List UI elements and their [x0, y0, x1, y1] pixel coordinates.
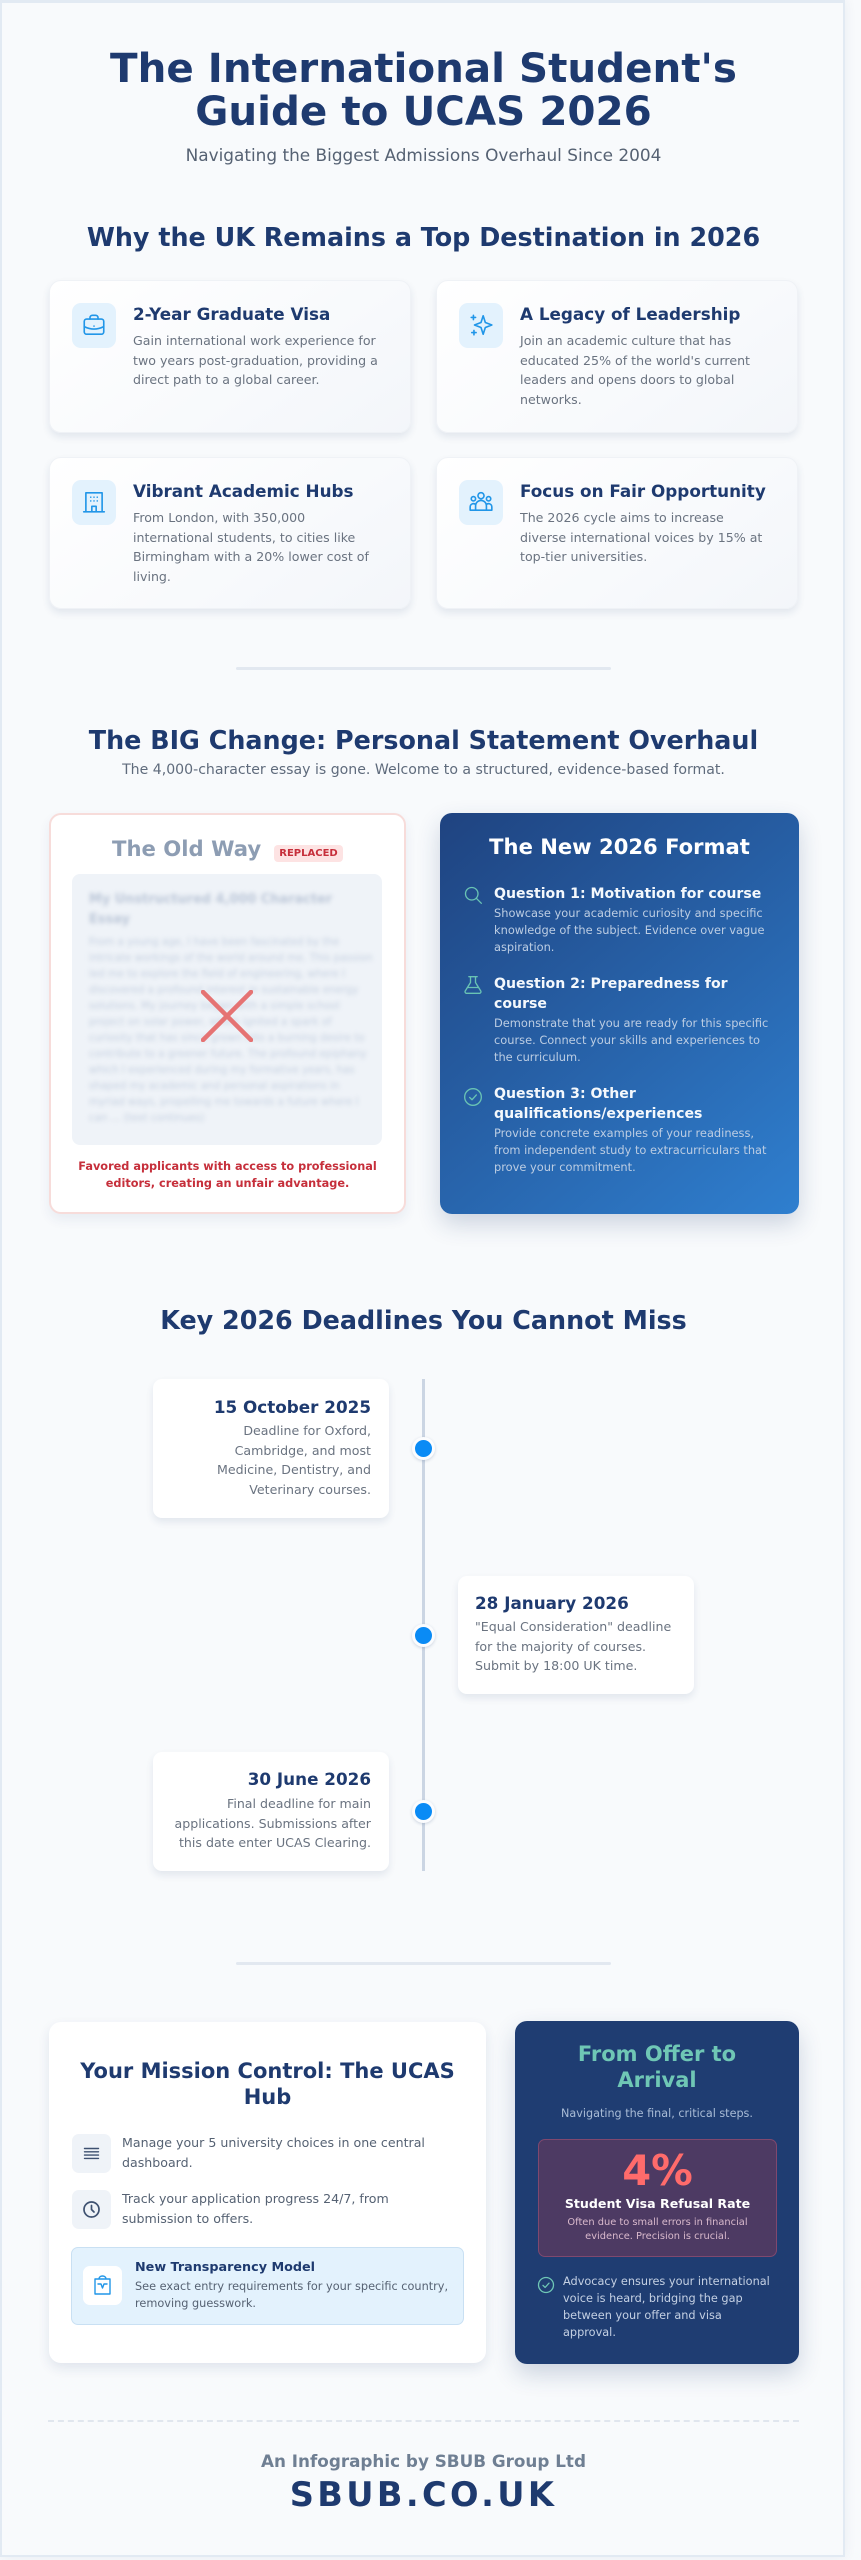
- stat note: [567, 2217, 748, 2242]
- description: Veterinary courses.: [249, 1482, 371, 1497]
- description: this date enter UCAS Clearing.: [179, 1835, 371, 1850]
- icon: building: [72, 480, 116, 525]
- feature text: Track your application progress 24/7, from: [122, 2191, 389, 2206]
- question 1 text: knowledge of the subject. Evidence over vague: [494, 923, 764, 937]
- callout: transparency: [71, 2247, 464, 2325]
- timeline dot 1: [412, 1437, 435, 1460]
- advocacy text: Advocacy ensures your international: [563, 2275, 770, 2288]
- card text: Join an academic culture that has: [520, 333, 731, 348]
- card text: From London, with 350,000: [133, 510, 305, 525]
- blurred essay: can ... (text continues): [89, 1113, 204, 1124]
- callout title: New Transparency Model: [135, 2260, 315, 2275]
- description: applications. Submissions after: [175, 1816, 371, 1831]
- description: Final deadline for main: [227, 1796, 371, 1811]
- arrival heading: From Offer to: [578, 2042, 736, 2066]
- badge: replaced: [274, 845, 343, 862]
- description: Cambridge, and most: [235, 1443, 371, 1458]
- card text: [520, 510, 762, 564]
- advocacy text: voice is heard, bridging the gap: [563, 2292, 743, 2305]
- question 3: [464, 1086, 767, 1174]
- stat panel: refusal rate: [538, 2139, 777, 2257]
- question 3 text: prove your commitment.: [494, 1160, 636, 1174]
- mission heading: Hub: [244, 2084, 291, 2108]
- description: "Equal Consideration" deadline: [475, 1619, 671, 1634]
- question 1: [464, 886, 764, 954]
- feature text: [122, 2191, 389, 2226]
- card text: [133, 510, 370, 584]
- icon: people: [459, 480, 503, 525]
- question 3 title: qualifications/experiences: [494, 1106, 702, 1122]
- question 1 text: [494, 906, 764, 954]
- panel: fair opportunity: [436, 457, 798, 609]
- blurred essay: intricate workings of the world around me. This passion: [89, 953, 373, 964]
- heading: deadlines: Key 2026 Deadlines You Cannot Miss: [160, 1305, 687, 1335]
- description: Deadline for Oxford,: [243, 1423, 371, 1438]
- timeline dot 2: [412, 1624, 435, 1647]
- description: [175, 1796, 371, 1850]
- callout text: removing guesswork.: [135, 2297, 256, 2310]
- card title: Focus on Fair Opportunity: [520, 481, 766, 501]
- mission heading: [80, 2059, 455, 2108]
- question 3 text: Provide concrete examples of your readiness,: [494, 1126, 754, 1140]
- blurred essay: [72, 874, 382, 1145]
- panel: mission control: [49, 2022, 486, 2363]
- question 3 text: [494, 1126, 767, 1174]
- new format heading: The New 2026 Format: [489, 834, 750, 859]
- card text: diverse international voices by 15% at: [520, 530, 762, 545]
- feature text: submission to offers.: [122, 2211, 253, 2226]
- title: [110, 44, 737, 135]
- feature text: Manage your 5 university choices in one central: [122, 2135, 425, 2150]
- blurred essay: shaped my academic and personal aspirations in: [89, 1081, 339, 1092]
- icon: flask: [464, 976, 482, 994]
- feature text: dashboard.: [122, 2155, 193, 2170]
- panel: the old way: [49, 813, 406, 1214]
- card text: top-tier universities.: [520, 549, 647, 564]
- old way note: Favored applicants with access to professional: [78, 1160, 377, 1173]
- card text: The 2026 cycle aims to increase: [520, 510, 724, 525]
- question 1 text: aspiration.: [494, 940, 554, 954]
- footer credit: An Infographic by SBUB Group Ltd: [261, 2451, 586, 2471]
- feature text: [122, 2135, 425, 2170]
- question 3 title: [494, 1086, 702, 1122]
- feature: tracking: [72, 2190, 389, 2229]
- question 1 title: Question 1: Motivation for course: [494, 886, 761, 902]
- subtitle: Navigating the Biggest Admissions Overhaul Since 2004: [186, 145, 661, 165]
- stat note: Often due to small errors in financial: [567, 2217, 748, 2228]
- card title: A Legacy of Leadership: [520, 304, 740, 324]
- date: 15 October 2025: [214, 1397, 371, 1417]
- timeline dot 3: [412, 1800, 435, 1823]
- title: Guide to UCAS 2026: [195, 87, 652, 135]
- advocacy text: approval.: [563, 2326, 616, 2339]
- description: Submit by 18:00 UK time.: [475, 1658, 637, 1673]
- card text: living.: [133, 569, 171, 584]
- panel: legacy of leadership: [436, 280, 798, 433]
- question 2 text: the curriculum.: [494, 1050, 581, 1064]
- feature: dashboard: [72, 2134, 425, 2173]
- question 2 title: Question 2: Preparedness for: [494, 976, 728, 992]
- badge: replaced: REPLACED: [279, 848, 338, 859]
- old way note: [78, 1160, 377, 1190]
- old way note: editors, creating an unfair advantage.: [106, 1177, 349, 1190]
- stat label: Student Visa Refusal Rate: [565, 2196, 750, 2211]
- question 2 title: course: [494, 996, 547, 1012]
- question 2 text: Demonstrate that you are ready for this specific: [494, 1016, 768, 1030]
- icon: clock: [72, 2190, 111, 2229]
- blurred essay: From a young age, I have been fascinated by the: [89, 937, 339, 948]
- card text: two years post-graduation, providing a: [133, 353, 378, 368]
- icon: list: [72, 2134, 111, 2173]
- deadline card: 28 January: [458, 1576, 694, 1694]
- heading: big change: The BIG Change: Personal Statement Overhaul: [89, 725, 758, 755]
- deadline card: 30 June: [153, 1752, 389, 1871]
- timeline line: [422, 1379, 425, 1871]
- card title: Vibrant Academic Hubs: [133, 481, 354, 501]
- blurred essay: solutions. My journey began with a simple school: [89, 1001, 340, 1012]
- heading: why the UK: Why the UK Remains a Top Destination in 2026: [87, 222, 760, 252]
- panel: the new format: [440, 813, 799, 1214]
- question 3 text: from independent study to extracurriculars that: [494, 1143, 767, 1157]
- deadline card: 15 October: [153, 1379, 389, 1518]
- question 1 text: Showcase your academic curiosity and specific: [494, 906, 763, 920]
- question 2 title: [494, 976, 728, 1012]
- icon: briefcase: [72, 303, 116, 348]
- description: [217, 1423, 371, 1497]
- panel: offer to arrival: [515, 2021, 799, 2364]
- advocacy text: between your offer and visa: [563, 2309, 722, 2322]
- callout text: See exact entry requirements for your specific country,: [135, 2280, 448, 2293]
- blurred essay: Essay: [89, 912, 130, 927]
- date: 28 January 2026: [475, 1593, 629, 1613]
- question 2: [464, 976, 768, 1064]
- mission heading: Your Mission Control: The UCAS: [80, 2059, 455, 2083]
- blurred essay: curiosity that has since grown into a burning desire to: [89, 1033, 364, 1044]
- icon: clipboard: [83, 2266, 122, 2305]
- stat note: evidence. Precision is crucial.: [585, 2231, 730, 2242]
- blurred essay: which I experienced during my formative years, has: [89, 1065, 354, 1076]
- blurred essay: led me to explore the field of engineering, where I: [89, 969, 345, 980]
- blurred essay: myriad ways, propelling me towards a future where I: [89, 1097, 359, 1108]
- icon: search: [464, 886, 482, 904]
- title: The International Student's: [110, 44, 737, 92]
- callout text: [135, 2280, 448, 2310]
- card text: networks.: [520, 392, 582, 407]
- icon: red cross: [201, 990, 253, 1042]
- arrival heading: Arrival: [617, 2068, 697, 2092]
- card text: Gain international work experience for: [133, 333, 376, 348]
- card text: direct path to a global career.: [133, 372, 319, 387]
- advocacy text: [563, 2275, 770, 2339]
- description: Medicine, Dentistry, and: [217, 1462, 371, 1477]
- blurred essay: discovered a profound interest in sustainable energy: [89, 985, 358, 996]
- card text: international students, to cities like: [133, 530, 355, 545]
- card text: educated 25% of the world's current: [520, 353, 750, 368]
- question 3 title: Question 3: Other: [494, 1086, 636, 1102]
- stat number: 4%: [622, 2146, 693, 2195]
- panel: 2-year graduate visa: [49, 280, 411, 433]
- description: [475, 1619, 671, 1673]
- blurred essay: project on solar power, which ignited a spark of: [89, 1017, 332, 1028]
- card title: 2-Year Graduate Visa: [133, 304, 330, 324]
- card text: [133, 333, 378, 387]
- icon: check: [538, 2276, 554, 2294]
- old way heading: The Old Way: [112, 836, 261, 861]
- card text: Birmingham with a 20% lower cost of: [133, 549, 369, 564]
- footer logo: SBUB.CO.UK: [290, 2475, 557, 2514]
- question 2 text: [494, 1016, 768, 1064]
- date: 30 June 2026: [248, 1769, 371, 1789]
- blurred essay: My Unstructured 4,000 Character: [89, 892, 332, 907]
- description: for the majority of courses.: [475, 1639, 646, 1654]
- panel: vibrant academic hubs: [49, 457, 411, 609]
- arrival heading: [578, 2042, 736, 2092]
- icon: check circle: [464, 1088, 482, 1106]
- arrival subheading: Navigating the final, critical steps.: [561, 2107, 753, 2120]
- section subheading: The 4,000-character essay is gone. Welcome to a structured, evidence-based format.: [122, 762, 725, 778]
- card text: [519, 333, 750, 407]
- timeline: [422, 1379, 425, 1871]
- card text: leaders and opens doors to global: [520, 372, 734, 387]
- question 2 text: course. Connect your skills and experiences to: [494, 1033, 760, 1047]
- blurred essay: contribute to a greener future. The profound epiphany: [89, 1049, 366, 1060]
- icon: sparkles: [459, 303, 503, 348]
